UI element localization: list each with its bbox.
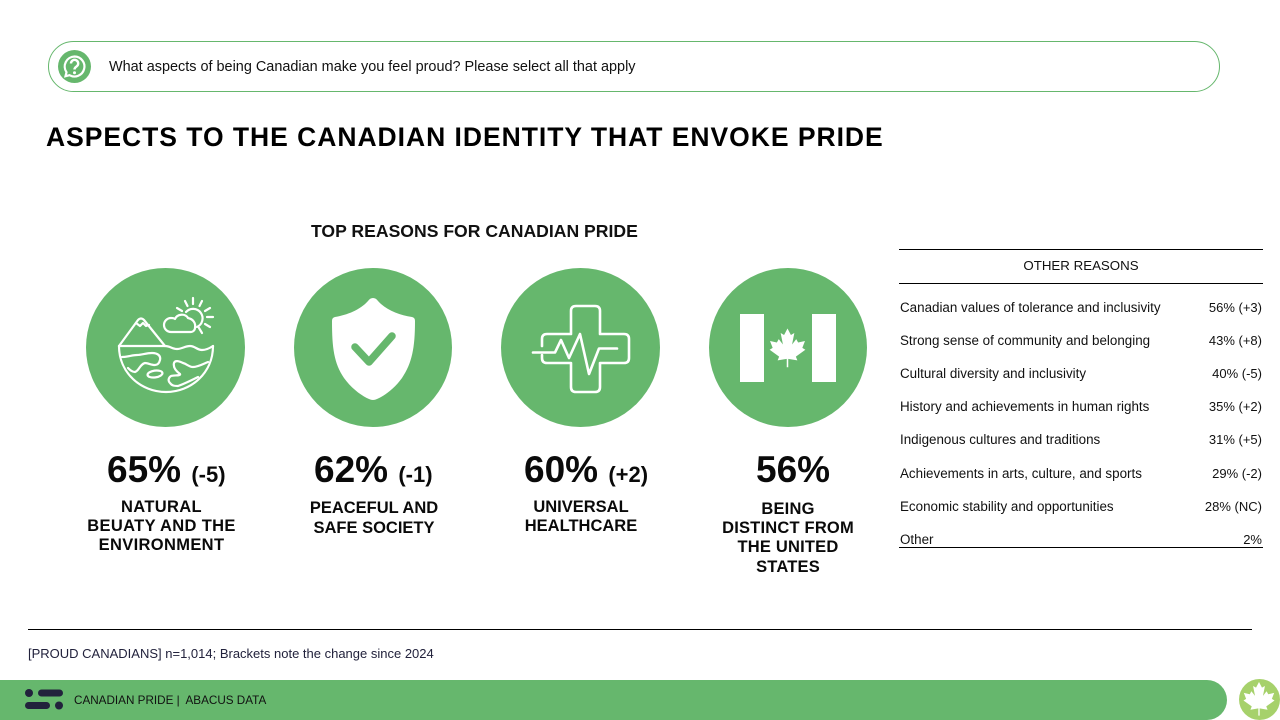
table: other reasons xyxy=(899,249,1263,548)
row: 56% (+3) xyxy=(1209,300,1262,315)
icon: question speech bubble xyxy=(58,50,91,83)
icon: Canadian flag xyxy=(709,268,867,427)
label: BEING xyxy=(761,500,815,518)
row: 29% (-2) xyxy=(1212,466,1262,481)
stat: natural beauty xyxy=(87,449,236,554)
value 65%: 65% (-5) xyxy=(107,449,226,490)
label: UNIVERSAL xyxy=(533,498,629,516)
row: Indigenous cultures and traditions xyxy=(900,432,1100,447)
row: Achievements in arts, culture, and sports xyxy=(900,466,1142,481)
row: 35% (+2) xyxy=(1209,399,1262,414)
icon: nature landscape xyxy=(86,268,245,427)
row: 2% xyxy=(1243,532,1262,547)
heading: top reasons: TOP REASONS FOR CANADIAN PRIDE xyxy=(311,221,638,241)
value 60%: 60% (+2) xyxy=(524,449,648,490)
value 56%: 56% xyxy=(756,449,830,490)
label: ENVIRONMENT xyxy=(99,536,224,554)
label: HEALTHCARE xyxy=(525,517,637,535)
question text: What aspects of being Canadian make you feel proud? Please select all that apply xyxy=(109,59,636,75)
label: BEUATY AND THE xyxy=(87,517,236,535)
label xyxy=(310,499,438,537)
icon: maple leaf badge xyxy=(1239,679,1280,720)
stat: peaceful society xyxy=(310,449,438,537)
icon: Abacus logo xyxy=(25,689,63,710)
row xyxy=(900,532,1262,547)
icon: health cross with pulse xyxy=(501,268,660,427)
footer bar xyxy=(0,680,1227,720)
row: Strong sense of community and belonging xyxy=(900,333,1150,348)
row xyxy=(900,466,1262,481)
stat: distinct from US xyxy=(722,449,854,576)
label: NATURAL xyxy=(121,498,202,516)
label: SAFE SOCIETY xyxy=(313,519,435,537)
label: DISTINCT FROM xyxy=(722,519,854,537)
row xyxy=(900,366,1262,381)
table heading: OTHER REASONS xyxy=(1023,258,1139,273)
row: Other xyxy=(900,532,934,547)
row: 28% (NC) xyxy=(1205,499,1262,514)
footer text: CANADIAN PRIDE | ABACUS DATA xyxy=(74,694,266,707)
title: ASPECTS TO THE CANADIAN IDENTITY THAT ENVOKE PRIDE xyxy=(46,122,884,152)
label xyxy=(87,498,236,554)
row xyxy=(900,432,1262,447)
row xyxy=(900,399,1262,414)
label xyxy=(722,500,854,576)
row: History and achievements in human rights xyxy=(900,399,1149,414)
icon: shield xyxy=(294,268,452,427)
row: Economic stability and opportunities xyxy=(900,499,1114,514)
label: THE UNITED xyxy=(738,538,838,556)
label: PEACEFUL AND xyxy=(310,499,438,517)
row: Canadian values of tolerance and inclusivity xyxy=(900,300,1161,315)
row: 43% (+8) xyxy=(1209,333,1262,348)
footnote: [PROUD CANADIANS] n=1,014; Brackets note the change since 2024 xyxy=(28,646,434,661)
row: 40% (-5) xyxy=(1212,366,1262,381)
row xyxy=(900,499,1262,514)
label: STATES xyxy=(756,558,820,576)
row: Cultural diversity and inclusivity xyxy=(900,366,1086,381)
question banner xyxy=(48,41,1220,92)
label xyxy=(525,498,637,535)
stat: universal healthcare xyxy=(524,449,648,535)
value 62%: 62% (-1) xyxy=(314,449,433,490)
row xyxy=(900,333,1262,348)
row: 31% (+5) xyxy=(1209,432,1262,447)
